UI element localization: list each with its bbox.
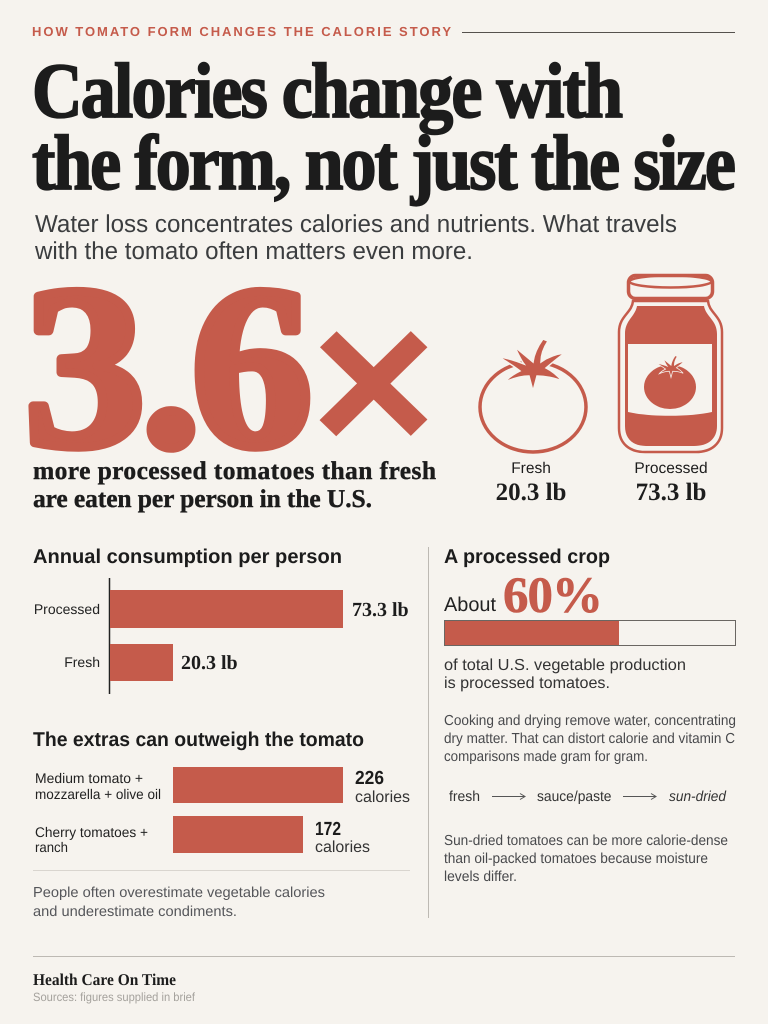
- bar chart: annual consumption: 20.3 lb: [181, 652, 238, 674]
- heading: a processed crop: A processed crop: [444, 546, 610, 568]
- heading: extras: The extras can outweigh the tomato: [33, 729, 364, 751]
- text: vegetable production: [444, 657, 686, 692]
- footer: Health Care On Time: [33, 970, 176, 989]
- stat caption: [33, 456, 436, 513]
- bar chart: extras: Cherry tomatoes +: [35, 824, 148, 840]
- title: the form, not just the size: [32, 121, 736, 207]
- label: processed amount: Processed: [634, 460, 708, 477]
- label: fresh amount: [496, 460, 566, 506]
- text: cooking and drying: dry matter. That can distort calorie and vitamin C: [444, 731, 735, 747]
- subtitle: [34, 211, 677, 265]
- text: sun-dried note: levels differ.: [444, 869, 517, 885]
- process flow: fresh to sun-dried: [449, 789, 727, 805]
- text: cooking and drying: [444, 713, 736, 765]
- bar chart: extras: mozzarella + olive oil: [35, 786, 161, 802]
- subtitle: with the tomato often matters even more.: [34, 238, 473, 265]
- big stat: 3.6x: ×: [310, 264, 436, 498]
- stat: about 60 percent: [444, 568, 603, 624]
- process flow: fresh to sun-dried: sauce/paste: [537, 789, 612, 805]
- progress bar: 60 percent: [444, 620, 736, 646]
- stat: about 60 percent: About: [444, 594, 496, 616]
- icon: processed jar: [619, 276, 722, 452]
- text: cooking and drying: comparisons made gram for gram.: [444, 749, 648, 765]
- stat: about 60 percent: 60%: [503, 568, 603, 624]
- bar chart: extras: 172: [315, 819, 341, 840]
- note: overestimate: People often overestimate vegetable calories: [33, 885, 325, 901]
- bar chart: extras: Medium tomato +: [35, 770, 143, 786]
- footer: Sources: figures supplied in brief: [33, 990, 196, 1004]
- process flow: fresh to sun-dried: fresh: [449, 789, 480, 805]
- bar chart: extras: calories: [355, 789, 410, 806]
- bar chart: extras: calories: [315, 839, 370, 856]
- title: Calories change with: [32, 49, 623, 135]
- bar chart: extras: 226: [355, 768, 384, 789]
- text: cooking and drying: Cooking and drying remove water, concentrating: [444, 713, 736, 729]
- label: processed amount: [634, 460, 708, 506]
- note: overestimate: and underestimate condiments.: [33, 904, 237, 920]
- text: vegetable production: of total U.S. vegetable production: [444, 657, 686, 674]
- footer: [33, 970, 196, 1004]
- label: fresh amount: 20.3 lb: [496, 479, 566, 506]
- bar chart: extras: [35, 767, 410, 856]
- text: sun-dried note: than oil-packed tomatoes because moisture: [444, 851, 708, 867]
- bar chart: annual consumption: 73.3 lb: [352, 599, 409, 621]
- bar chart: annual consumption: [34, 578, 409, 694]
- bar chart: annual consumption: Fresh: [64, 654, 100, 670]
- big stat: 3.6x: [24, 239, 436, 498]
- title: [32, 49, 736, 207]
- text: sun-dried note: Sun-dried tomatoes can be more calorie-dense: [444, 833, 728, 849]
- text: vegetable production: is processed tomatoes.: [444, 675, 610, 692]
- icon: fresh tomato: [480, 339, 586, 452]
- label: fresh amount: Fresh: [511, 460, 551, 477]
- subtitle: Water loss concentrates calories and nutrients. What travels: [35, 211, 677, 238]
- text: sun-dried note: [444, 833, 728, 885]
- stat caption: are eaten per person in the U.S.: [33, 484, 372, 513]
- bar chart: annual consumption: Processed: [34, 601, 100, 617]
- stat caption: more processed tomatoes than fresh: [33, 456, 436, 485]
- bar chart: extras: ranch: [35, 839, 68, 855]
- process flow: fresh to sun-dried: sun-dried: [669, 789, 727, 805]
- label: processed amount: 73.3 lb: [636, 479, 706, 506]
- heading: annual consumption: Annual consumption per person: [33, 546, 342, 568]
- eyebrow heading: HOW TOMATO FORM CHANGES THE CALORIE STORY: [32, 24, 451, 39]
- big stat: 3.6x: 3.6: [24, 239, 313, 496]
- note: overestimate: [33, 885, 325, 920]
